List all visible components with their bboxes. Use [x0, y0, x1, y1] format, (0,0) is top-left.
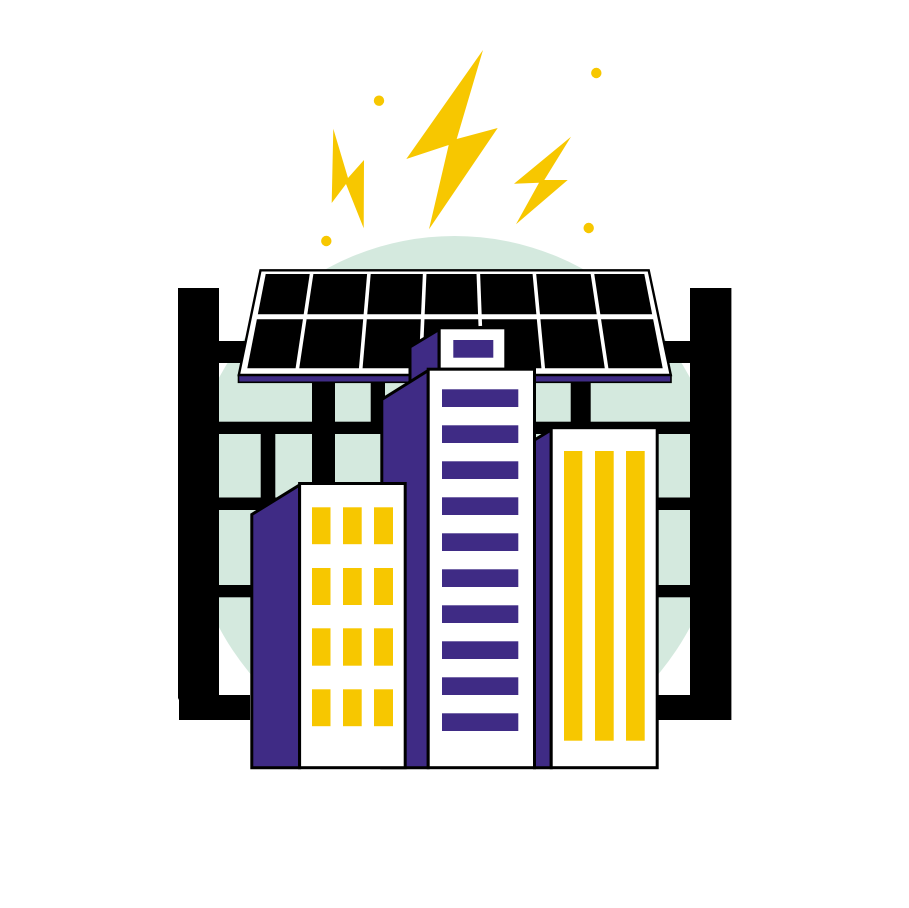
central tower windows — [442, 389, 518, 731]
left building front — [300, 484, 405, 768]
icon: left lightning bolt — [332, 129, 364, 228]
panel frame — [239, 270, 671, 375]
rooftop unit window — [453, 340, 493, 358]
right building window stripes — [564, 451, 645, 741]
background circle — [188, 236, 721, 769]
right building side — [534, 430, 551, 768]
central tower — [382, 369, 534, 768]
panel base bar — [238, 375, 671, 382]
icon: large central lightning bolt — [406, 50, 498, 229]
right building — [534, 428, 657, 768]
central tower side — [382, 370, 428, 768]
solar panel — [238, 270, 671, 382]
central tower front — [428, 369, 534, 768]
panel grid lines — [253, 273, 656, 369]
left building windows — [312, 507, 393, 726]
icon: lightning bolts and sparks — [321, 50, 602, 246]
icon: right lightning bolt — [514, 137, 571, 224]
left building side — [252, 485, 300, 768]
left building — [252, 484, 405, 768]
spark dots — [321, 68, 602, 246]
fence frame behind the buildings — [178, 288, 731, 720]
rooftop unit front — [439, 328, 506, 369]
rooftop unit side — [410, 330, 439, 385]
panel cells — [247, 274, 663, 368]
rooftop unit on central tower — [410, 328, 506, 385]
right building front — [551, 428, 657, 768]
